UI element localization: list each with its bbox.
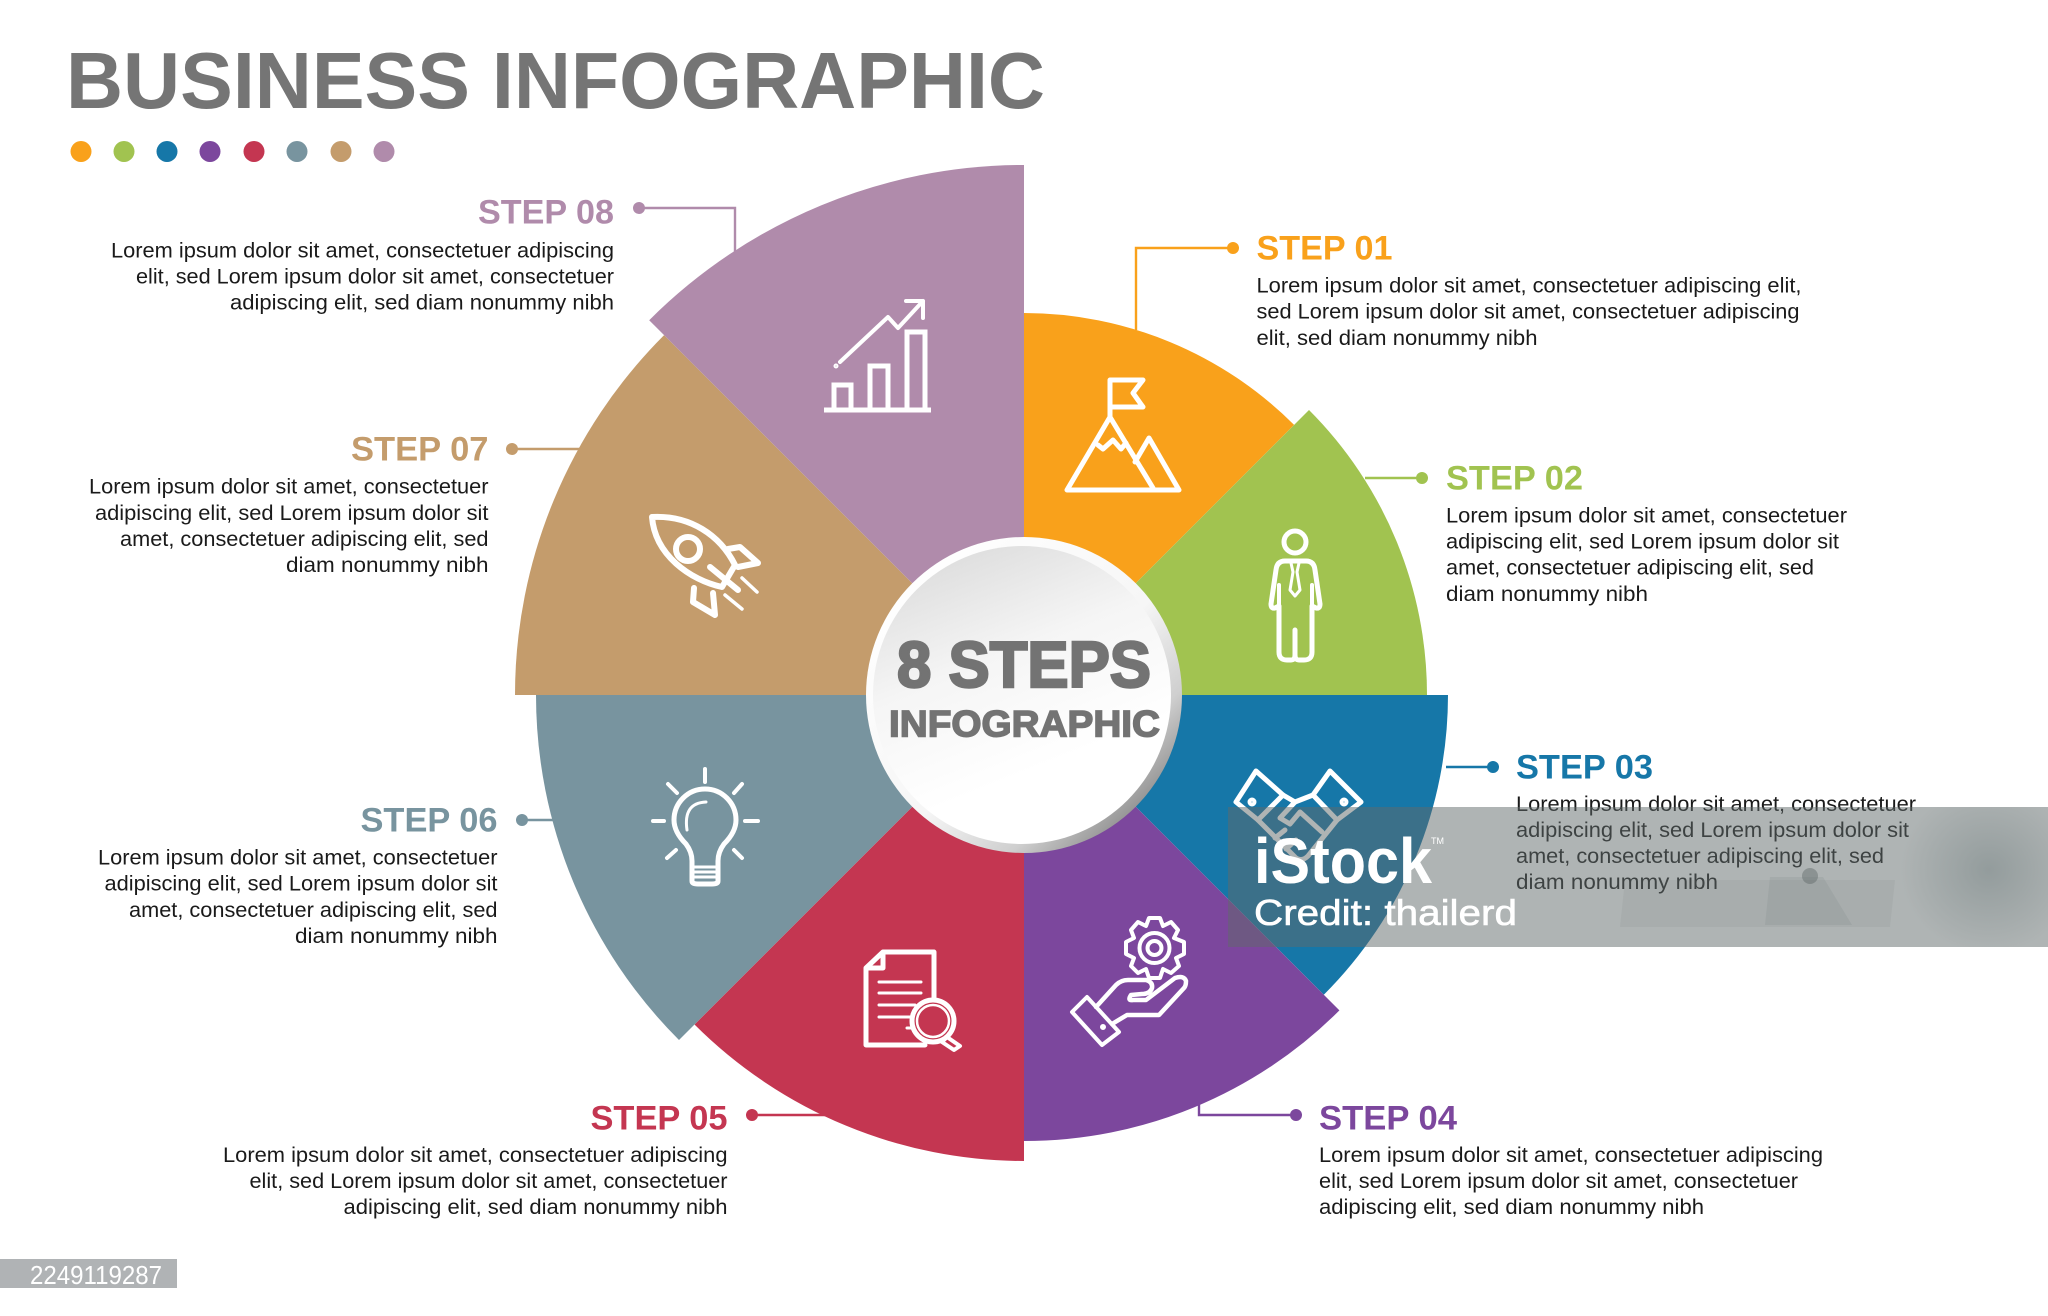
connector: step 02 xyxy=(1365,477,1422,479)
heading: step 01: STEP 01 xyxy=(1256,230,1392,268)
text: step 04: adipiscing elit, sed diam nonummy nibh xyxy=(1319,1196,1704,1219)
text: step 08: Lorem ipsum dolor sit amet, consectetuer adipiscing xyxy=(111,239,614,262)
heading: step 04: STEP 04 xyxy=(1319,1100,1457,1138)
sector: step 04 xyxy=(1024,695,1339,1141)
connector dot: step 06 xyxy=(516,814,528,826)
sector: step 07 xyxy=(515,335,1024,695)
watermark credit: Credit: thailerd xyxy=(1254,892,1517,933)
connector: step 07 xyxy=(512,448,583,450)
icon: handshake xyxy=(1236,771,1361,860)
icon: light bulb xyxy=(653,769,758,884)
badge label: 8 steps: 8 STEPS xyxy=(897,628,1151,701)
centre badge xyxy=(866,537,1182,853)
connector dot: step 02 xyxy=(1416,472,1428,484)
connector: step 08 xyxy=(639,208,735,255)
sector: step 01 xyxy=(1024,313,1294,695)
stock id tag: 2249119287 xyxy=(30,1260,162,1290)
connector dot: step 08 xyxy=(633,202,645,214)
watermark logo: iStock xyxy=(1254,825,1432,897)
panel: step 04 xyxy=(1024,695,1823,1219)
text: step 07: adipiscing elit, sed Lorem ipsum dolor sit xyxy=(95,502,489,525)
heading: step 07: STEP 07 xyxy=(351,430,488,468)
icon: document with magnifier xyxy=(866,952,960,1050)
text: step 08 xyxy=(111,239,614,314)
connector: step 05 xyxy=(752,1114,830,1116)
sector: step 02 xyxy=(1024,410,1427,695)
text: step 02: diam nonummy nibh xyxy=(1446,583,1648,606)
heading: step 08: STEP 08 xyxy=(478,194,614,232)
sector: step 08 xyxy=(649,165,1024,695)
text: step 03: amet, consectetuer adipiscing elit, sed xyxy=(1516,845,1884,868)
text: step 03: Lorem ipsum dolor sit amet, consectetuer xyxy=(1516,793,1916,816)
panel: step 02 xyxy=(1024,410,1847,695)
text: step 02 xyxy=(1446,504,1847,606)
watermark band xyxy=(1228,807,2048,947)
text: step 07: amet, consectetuer adipiscing elit, sed xyxy=(120,528,488,551)
sector: step 05 xyxy=(694,695,1024,1161)
text: step 05: Lorem ipsum dolor sit amet, consectetuer adipiscing xyxy=(223,1144,728,1167)
badge label: infographic: INFOGRAPHIC xyxy=(889,704,1160,744)
icon: rocket xyxy=(652,517,758,615)
icon: growth chart xyxy=(824,301,931,410)
panel: step 06 xyxy=(98,695,1024,1040)
connector: step 01 xyxy=(1136,248,1233,330)
sector: step 03 xyxy=(1024,695,1448,995)
badge face xyxy=(873,546,1171,844)
text: step 06: diam nonummy nibh xyxy=(295,925,498,948)
text: step 04: elit, sed Lorem ipsum dolor sit amet, consectetuer xyxy=(1319,1170,1798,1193)
text: step 02: Lorem ipsum dolor sit amet, consectetuer xyxy=(1446,504,1847,527)
heading: step 02: STEP 02 xyxy=(1446,460,1583,498)
connector dot: step 03 xyxy=(1487,761,1499,773)
text: step 06 xyxy=(98,846,498,948)
text: step 07 xyxy=(89,475,489,577)
heading: step 05: STEP 05 xyxy=(590,1100,728,1138)
text: step 01: Lorem ipsum dolor sit amet, consectetuer adipiscing elit, xyxy=(1256,274,1802,298)
connector: step 06 xyxy=(522,819,555,821)
text: step 07: diam nonummy nibh xyxy=(286,554,488,577)
connector dot: step 05 xyxy=(746,1109,758,1121)
text: step 05 xyxy=(223,1144,728,1219)
connector dot: step 04 xyxy=(1290,1109,1302,1121)
heading: step 06: STEP 06 xyxy=(360,802,498,840)
badge outer ring xyxy=(866,537,1182,853)
text: step 04 xyxy=(1319,1144,1823,1219)
connector: step 03 xyxy=(1446,766,1493,768)
panel: step 08 xyxy=(111,165,1024,695)
icon: hand holding gear xyxy=(1072,918,1186,1045)
icon: businessman xyxy=(1271,531,1320,660)
connector dot: step 07 xyxy=(506,443,518,455)
text: step 08: elit, sed Lorem ipsum dolor sit amet, consectetuer xyxy=(136,265,614,288)
text: step 06: adipiscing elit, sed Lorem ipsum dolor sit xyxy=(104,872,498,895)
sector: step 06 xyxy=(536,695,1024,1040)
text: step 06: amet, consectetuer adipiscing elit, sed xyxy=(129,899,498,922)
colour dots row xyxy=(70,141,394,162)
text: step 02: adipiscing elit, sed Lorem ipsum dolor sit xyxy=(1446,530,1839,553)
text: step 05: elit, sed Lorem ipsum dolor sit amet, consectetuer xyxy=(250,1170,728,1193)
panel: step 01 xyxy=(1024,230,1802,695)
text: step 06: Lorem ipsum dolor sit amet, consectetuer xyxy=(98,846,498,869)
panel: step 07 xyxy=(89,335,1024,695)
trademark mark: TM xyxy=(1431,836,1444,846)
text: step 04: Lorem ipsum dolor sit amet, consectetuer adipiscing xyxy=(1319,1144,1823,1167)
text: step 03: diam nonummy nibh xyxy=(1516,871,1718,894)
panel: step 03 xyxy=(1024,695,1916,995)
text: step 08: adipiscing elit, sed diam nonummy nibh xyxy=(230,291,614,314)
connector: step 04 xyxy=(1199,1100,1296,1115)
text: step 01: elit, sed diam nonummy nibh xyxy=(1256,327,1538,350)
text: step 03: adipiscing elit, sed Lorem ipsum dolor sit xyxy=(1516,819,1909,842)
text: step 01: sed Lorem ipsum dolor sit amet, consectetuer adipiscing xyxy=(1256,301,1800,324)
title: BUSINESS INFOGRAPHIC xyxy=(66,36,1045,125)
text: step 01 xyxy=(1256,274,1802,350)
text: step 02: amet, consectetuer adipiscing elit, sed xyxy=(1446,556,1814,579)
connector dot: step 01 xyxy=(1227,242,1239,254)
icon: mountain with flag xyxy=(1067,380,1179,490)
text: step 03 xyxy=(1516,793,1916,894)
text: step 07: Lorem ipsum dolor sit amet, consectetuer xyxy=(89,475,489,498)
text: step 05: adipiscing elit, sed diam nonummy nibh xyxy=(344,1196,728,1219)
heading: step 03: STEP 03 xyxy=(1516,748,1653,786)
panel: step 05 xyxy=(223,695,1024,1219)
